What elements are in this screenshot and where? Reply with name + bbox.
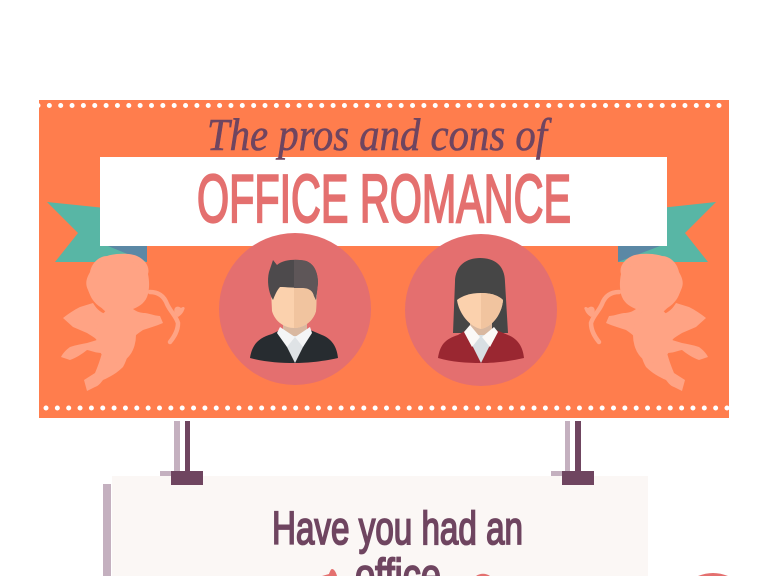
circle: man background <box>219 233 371 385</box>
icon: heart top <box>322 569 337 576</box>
question text: Have you had an <box>272 502 523 554</box>
post: right <box>551 421 581 477</box>
post foot: right <box>562 471 594 485</box>
panel: billboard banner <box>39 100 729 418</box>
white title band <box>100 157 667 246</box>
top dotted border <box>38 103 729 108</box>
icon: right cherub <box>584 254 708 391</box>
bottom dotted border <box>46 406 729 410</box>
post foot: left <box>171 471 203 485</box>
icon: man avatar <box>250 260 338 363</box>
question text <box>272 502 523 576</box>
ribbon: left <box>47 202 147 262</box>
icon: woman avatar <box>438 258 524 363</box>
icon: circle top right <box>698 573 728 576</box>
panel: question card <box>112 476 648 576</box>
icon: left cherub <box>61 254 185 391</box>
ribbon: right <box>618 202 716 262</box>
post: left <box>160 421 190 477</box>
card left edge <box>103 484 111 576</box>
circle: woman background <box>405 234 557 386</box>
subtitle: The pros and cons of: The pros and cons of <box>207 110 552 160</box>
icon: circle top middle <box>476 574 490 576</box>
